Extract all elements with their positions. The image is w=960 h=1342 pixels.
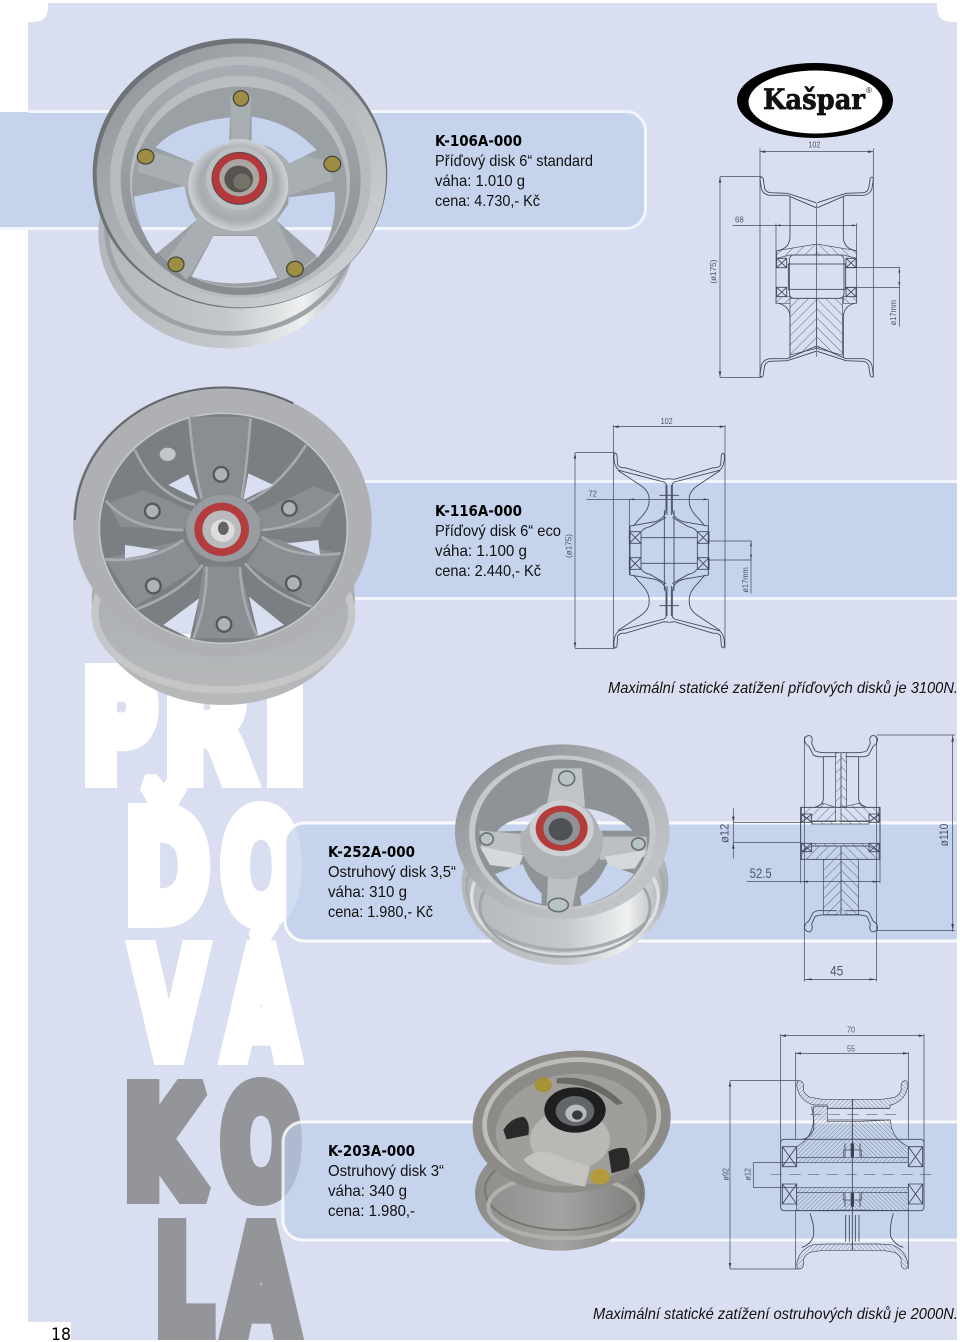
chart: K-116A technical drawing: 72 [588,489,597,499]
title: vertical lettering: O [221,1060,300,1229]
text: K-116A details: cena: 2.440,- Kč [435,563,541,580]
title: vertical lettering: V [133,921,205,1090]
icon: Kašpar logo: ® [866,86,872,95]
title: vertical lettering: P [82,644,156,813]
text: K-203A details: K-203A-000 [328,1142,415,1160]
text: K-106A details: Příďový disk 6“ standard [435,153,593,170]
text: K-116A details [435,502,561,580]
chart: K-203A technical drawing: ø92 [722,1167,731,1181]
chart: K-252A technical drawing: ø12 [718,823,732,843]
title: vertical lettering: Ď [125,784,209,953]
chart: K-116A technical drawing: (ø175) [563,534,573,558]
chart: K-106A technical drawing: ø17mm [889,300,898,325]
title: vertical lettering: Á [226,920,297,1090]
title: vertical lettering [82,643,306,1342]
panel: band K-252A [285,823,957,941]
title: vertical lettering: K [124,1059,207,1229]
text: K-106A details [435,132,593,210]
chart: K-106A technical drawing: 68 [735,214,744,224]
chart: K-116A technical drawing: 102 [661,416,673,426]
chart: K-252A technical drawing: 45 [830,962,844,978]
chart: K-203A technical drawing: 55 [847,1043,855,1053]
chart: K-106A technical drawing: 102 [808,140,820,150]
text: K-106A details: cena: 4.730,- Kč [435,193,540,210]
text: K-203A details: cena: 1.980,- [328,1203,415,1220]
panel: band K-203A [283,1122,957,1240]
text: K-252A details: váha: 310 g [328,884,407,901]
icon: wheel K-252A photo [455,744,670,965]
chart: K-252A technical drawing [718,735,955,982]
text: K-116A details: váha: 1.100 g [435,543,527,560]
text: K-252A details: Ostruhový disk 3,5“ [328,864,456,881]
title: vertical lettering: O [221,784,300,953]
text: K-203A details: váha: 340 g [328,1183,407,1200]
chart: K-252A technical drawing: ø110 [937,823,951,846]
text: K-252A details: cena: 1.980,- Kč [328,904,433,921]
text: K-252A details: K-252A-000 [328,843,415,861]
chart: K-252A technical drawing: 52.5 [750,865,772,881]
panel: band K-116A [330,482,957,598]
chart: K-203A technical drawing: 70 [847,1025,855,1035]
icon: Kašpar logo: Kašpar [763,83,866,116]
text: K-116A details: Příďový disk 6“ eco [435,523,561,540]
icon: wheel K-116A photo [73,387,372,705]
title: vertical lettering: Í [264,643,306,813]
chart: K-203A technical drawing [722,1025,933,1269]
text: K-252A details [328,843,456,921]
page number [0,1322,960,1342]
text: K-106A details: váha: 1.010 g [435,173,525,190]
panel: band K-106A [0,112,647,228]
text: K-116A details: K-116A-000 [435,502,522,520]
chart: K-106A technical drawing [708,140,900,377]
text: K-106A details: K-106A-000 [435,132,522,150]
icon: wheel K-106A photo [93,38,387,348]
icon: Kašpar logo [737,63,893,138]
text: K-203A details: Ostruhový disk 3“ [328,1163,444,1180]
title: vertical lettering: Ř [164,643,252,813]
chart: K-106A technical drawing: (ø175) [708,260,718,284]
chart: K-116A technical drawing [563,416,752,648]
chart: K-116A technical drawing: ø17mm [741,567,750,593]
icon: wheel K-203A photo [465,1041,678,1251]
chart: K-203A technical drawing: ø12 [744,1167,753,1181]
text: K-203A details [328,1142,444,1220]
